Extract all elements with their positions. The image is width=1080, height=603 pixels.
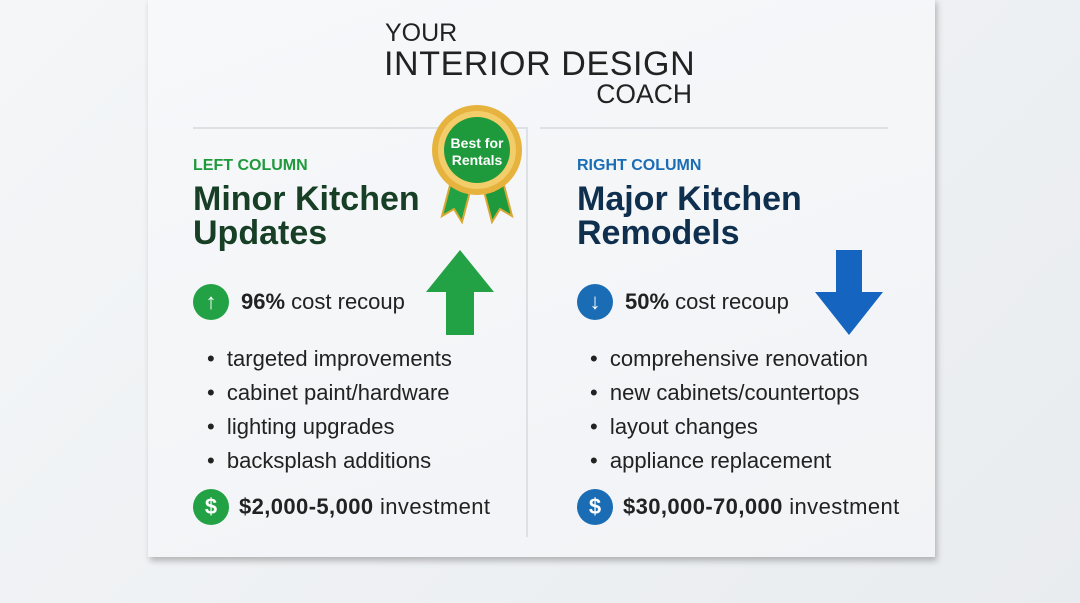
bullet list <box>590 346 868 473</box>
badge: best for rentals <box>432 105 522 224</box>
investment: $30,000-70,000 investment <box>623 494 900 519</box>
bullet list: • layout changes <box>590 414 758 439</box>
right heading: Major Kitchen <box>577 180 802 218</box>
panel: left column <box>193 127 528 537</box>
stat: 96%: ↑ <box>206 289 216 314</box>
stat: 50% <box>577 284 789 320</box>
right label: RIGHT COLUMN <box>577 157 701 174</box>
stat: 50%: 50% cost recoup <box>625 289 789 314</box>
bullet list: • targeted improvements <box>207 346 452 371</box>
badge: best for rentals: Best for <box>451 135 504 151</box>
stat: 96% <box>193 284 405 320</box>
left heading: Updates <box>193 214 327 252</box>
investment: $2,000-5,000 investment <box>239 494 490 519</box>
stat: 96%: 96% cost recoup <box>241 289 405 314</box>
badge: best for rentals: Rentals <box>452 152 502 168</box>
left heading <box>193 180 420 252</box>
right heading <box>577 180 802 252</box>
bullet list: • cabinet paint/hardware <box>207 380 450 405</box>
investment: $ <box>589 494 601 519</box>
right heading: Remodels <box>577 214 740 252</box>
arrow: down blue <box>815 250 883 335</box>
investment <box>193 489 490 525</box>
investment: $ <box>205 494 217 519</box>
bullet list <box>207 346 452 473</box>
bullet list: • new cabinets/countertops <box>590 380 859 405</box>
title: YOUR <box>385 19 457 47</box>
stat: 50%: ↓ <box>590 289 600 314</box>
title <box>384 19 695 109</box>
bullet list: • appliance replacement <box>590 448 831 473</box>
left label: LEFT COLUMN <box>193 157 308 174</box>
card <box>148 0 935 557</box>
bullet list: • comprehensive renovation <box>590 346 868 371</box>
left heading: Minor Kitchen <box>193 180 420 218</box>
investment <box>577 489 900 525</box>
title: COACH <box>596 79 692 109</box>
bullet list: • lighting upgrades <box>207 414 394 439</box>
bullet list: • backsplash additions <box>207 448 431 473</box>
title: INTERIOR DESIGN <box>384 45 695 83</box>
panel: right column <box>540 127 888 537</box>
arrow: up green <box>426 250 494 335</box>
